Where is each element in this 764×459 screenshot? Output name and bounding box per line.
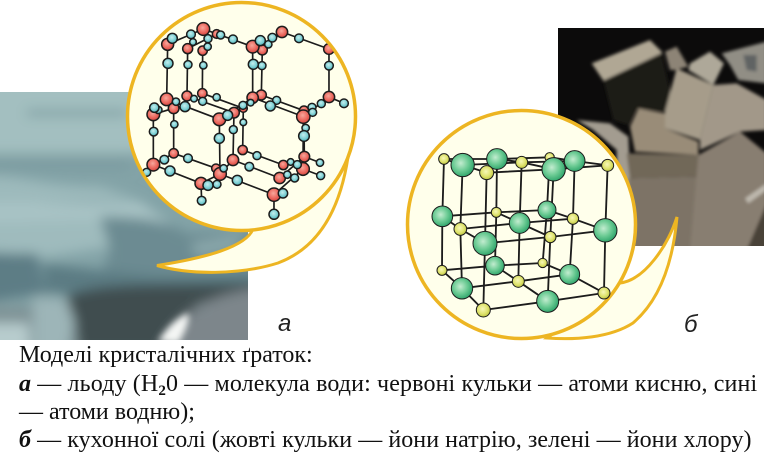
callout tail a <box>157 157 348 272</box>
caption text <box>18 342 757 453</box>
label: b: б <box>684 311 698 338</box>
label: a: а <box>278 310 291 337</box>
callout: salt lattice bubble <box>408 110 677 339</box>
caption line b: б — кухонної солі (жовті кульки — йони натрію, зелені — йони хлору) <box>19 427 752 453</box>
callout circle b <box>408 110 636 338</box>
callout circle a <box>128 2 356 230</box>
model: salt crystal lattice <box>432 149 617 317</box>
caption title: Моделі кристалічних ґраток: <box>19 342 313 368</box>
photo: salt crystals <box>558 28 764 250</box>
caption line a: а — льоду (Н20 — молекула води: червоні кульки — атоми кисню, сині <box>19 371 757 399</box>
caption line a continued: — атоми водню); <box>19 399 195 425</box>
model: ice crystal lattice <box>143 23 348 219</box>
callout tail b <box>547 217 677 339</box>
callout: ice lattice bubble <box>128 2 356 272</box>
photo: ice and snow <box>0 92 248 340</box>
